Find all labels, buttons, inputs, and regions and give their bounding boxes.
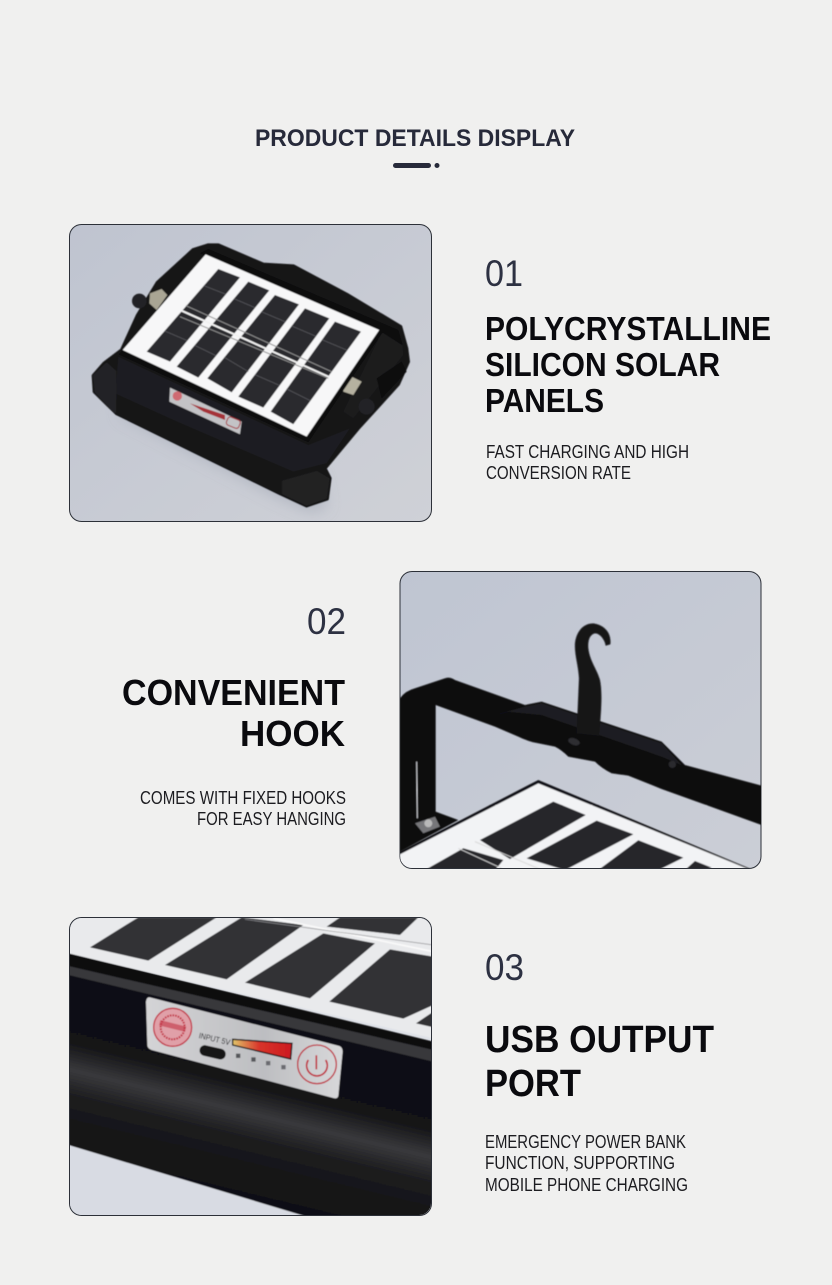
panel: usb port photo — [68, 917, 433, 1217]
number 02: 02 — [307, 601, 346, 642]
title: convenient hook — [122, 672, 345, 754]
title: polycrystalline silicon solar panels — [485, 310, 771, 419]
title: usb output port — [485, 1019, 714, 1105]
title: usb output port: PORT — [485, 1063, 581, 1105]
title: convenient hook: HOOK — [240, 713, 345, 754]
text: emergency power bank — [485, 1132, 688, 1195]
number 03: 03 — [485, 947, 524, 988]
icon: device label — [169, 388, 242, 434]
text: fast charging — [486, 442, 689, 483]
icon: control label — [146, 997, 343, 1098]
icon: device body — [93, 245, 408, 512]
title: usb output port: USB OUTPUT — [485, 1019, 714, 1061]
text: emergency power bank: EMERGENCY POWER BANK — [485, 1132, 686, 1152]
icon: white board with cells — [68, 917, 433, 1038]
icon: white solar board — [119, 254, 383, 442]
text: fast charging: CONVERSION RATE — [486, 463, 631, 483]
title: polycrystalline silicon solar panels: SILICON SOLAR — [485, 346, 720, 383]
text: emergency power bank: FUNCTION, SUPPORTING — [485, 1153, 675, 1173]
icon: device side — [68, 953, 433, 1217]
title: polycrystalline silicon solar panels: PANELS — [485, 382, 604, 419]
panel: hook photo — [400, 572, 762, 873]
text: fixed hooks: FOR EASY HANGING — [197, 809, 346, 829]
text: emergency power bank: MOBILE PHONE CHARGING — [485, 1175, 688, 1195]
text: fixed hooks — [140, 788, 346, 829]
icon: solar board corner — [400, 780, 753, 873]
heading: product details display: PRODUCT DETAILS DISPLAY — [255, 125, 575, 152]
text: fixed hooks: COMES WITH FIXED HOOKS — [140, 788, 346, 808]
title: polycrystalline silicon solar panels: POLYCRYSTALLINE — [485, 310, 771, 347]
icon: control label: INPUT 5V — [198, 1031, 232, 1047]
title: convenient hook: CONVENIENT — [122, 672, 345, 713]
icon: hook — [575, 623, 610, 736]
icon: bracket arm — [400, 678, 762, 852]
heading: product details display — [255, 125, 575, 168]
text: fast charging: FAST CHARGING AND HIGH — [486, 442, 689, 462]
number 01: 01 — [485, 253, 523, 294]
panel: solar panel photo — [70, 224, 432, 522]
